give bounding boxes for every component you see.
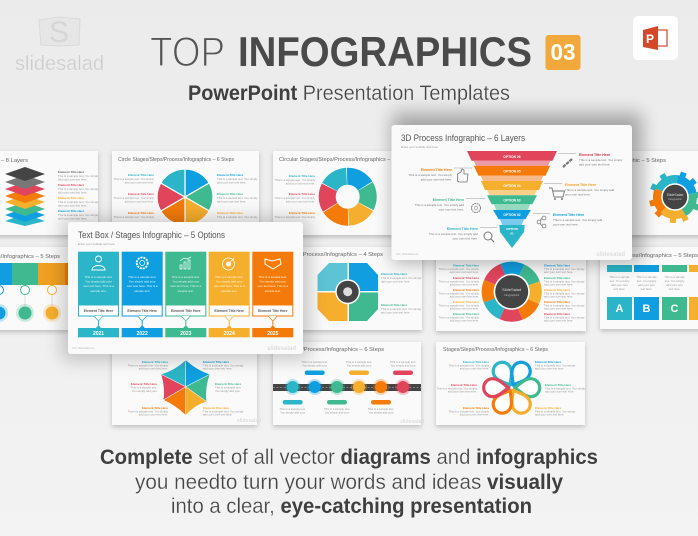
panel: flower card: add your own text here. <box>448 390 477 394</box>
title: TOP <box>150 28 225 75</box>
panel: 4 steps card: Element Title Here <box>381 303 407 307</box>
callout: left lower: This is a sample text. You simply add <box>429 232 478 236</box>
panel: flower card <box>436 342 586 425</box>
panel: wheel card: Element Title Here <box>544 264 570 268</box>
panel: circle stages card: Element Title Here <box>128 192 154 196</box>
panel: hexagon card: This is a sample text. <box>215 386 241 390</box>
panel: A B C card: text. You simply <box>665 279 685 283</box>
panel: wheel card: This is a sample text. You simply <box>439 316 480 320</box>
column 2025: Element Title Here <box>258 309 288 313</box>
panel: flower card: Element Title Here <box>463 406 489 410</box>
flower chart <box>484 359 540 416</box>
panel: hexagon card <box>112 342 261 425</box>
column 2024: 2024 <box>224 331 235 337</box>
panel: text box stages featured card: slidesalad <box>267 346 296 352</box>
panel: road timeline card: This is a sample text. <box>346 360 372 364</box>
panel: circle stages card: This is a sample text. You simply <box>217 215 258 219</box>
panel: circular stages card: add your own text here. <box>286 182 315 186</box>
panel: hexagon card: You simply add your <box>132 389 157 393</box>
panel: hexagon card: Element Title Here <box>215 382 241 386</box>
subtitle: PowerPoint Presentation Templates <box>188 82 510 105</box>
panel: 3D process funnel featured card: 3D Process Infographic – 6 Layers <box>401 133 526 143</box>
panel: 8 layers card: add your own text here. <box>58 190 87 194</box>
panel: circle stages card: Element Title Here <box>217 192 243 196</box>
panel: road timeline card: This is a sample text. <box>280 407 306 411</box>
panel: hexagon card: add your own text here. <box>139 366 168 370</box>
panel: A B C card: text here. <box>669 287 681 291</box>
panel: text box stages featured card <box>62 218 310 360</box>
badge: 03: 03 <box>550 39 576 65</box>
panel: A B C card: This is a sample <box>664 275 685 279</box>
panel: road timeline card: Stages/Steps/Process/Infographics – 6 Steps <box>268 347 384 353</box>
panel: hexagon card: Element Title Here <box>142 360 168 364</box>
callout: left lower: Element Title Here <box>447 227 478 231</box>
panel: text box stages featured card: Text Box / Stages Infographic – 5 Options <box>78 230 226 240</box>
panel: 8 layers card: add your own text here. <box>58 204 87 208</box>
panel: wheel card: Element Title Here <box>453 288 479 292</box>
panel: flower card: Element Title Here <box>535 406 561 410</box>
column 2022: own text here. This is a <box>127 284 158 288</box>
panel: circular stages card: This is a sample text. You simply <box>275 215 316 219</box>
column 2022 <box>122 252 163 337</box>
panel: 8 layers card: add your own text here. <box>58 216 87 220</box>
panel: circle stages card: This is a sample text. You simply <box>114 215 155 219</box>
panel: 4 steps card: add your own text here. <box>381 310 410 314</box>
icon: PowerPoint: P <box>646 32 654 46</box>
callout: left lower: your own text here. <box>452 236 478 240</box>
column 2023: You simply add your <box>172 280 199 284</box>
panel: circle stages card: This is a sample text. You simply <box>114 177 155 181</box>
column 2022: This is a sample text. <box>128 275 156 279</box>
column 2021: 2021 <box>93 331 104 337</box>
panel: road timeline card: You simply add your <box>280 410 305 414</box>
panel: circle stages card: This is a sample text. You simply <box>217 177 258 181</box>
column 2023: This is a sample text. <box>172 275 200 279</box>
column 2021: You simply add your <box>85 280 112 284</box>
panel: 5 steps left card <box>0 247 75 330</box>
panel: flower card: add your own text here. <box>460 412 489 416</box>
callout: right middle <box>544 183 615 200</box>
title: INFOGRAPHICS <box>238 28 532 75</box>
pie chart <box>157 169 213 225</box>
panel: wheel card: Element Title Here <box>453 264 479 268</box>
panel: wheel card: Element Title Here <box>453 312 479 316</box>
column 2022: 2022 <box>137 331 148 337</box>
panel: wheel card: add your own text here. <box>450 270 479 274</box>
callout: right middle: Element Title Here <box>565 183 596 187</box>
panel: circular stages card: This is a sample text. You simply <box>275 196 316 200</box>
callout: left top: This is a sample text. You simply <box>409 173 452 177</box>
callout: left middle: your own text here. <box>438 208 464 212</box>
panel: hexagon card: Element Title Here <box>142 406 168 410</box>
panel: wheel card: add your own text here. <box>450 318 479 322</box>
column 2025: sample text. <box>265 289 281 293</box>
panel: road timeline card: You simply add your <box>390 364 416 368</box>
callout: right middle: your own text here. <box>565 192 591 196</box>
callout: left top <box>409 168 472 182</box>
letter tiles: B <box>643 303 651 315</box>
wheel chart: Infographics <box>504 293 520 297</box>
panel: flower card: add your own text here. <box>535 412 564 416</box>
step markers <box>285 379 411 395</box>
stacked layers <box>5 167 45 226</box>
panel: wheel card: This is a sample text. You simply <box>544 316 585 320</box>
panel: circle stages card: add your own text here. <box>217 200 246 204</box>
panel: hexagon card: Element Title Here <box>203 360 229 364</box>
bottom text block: into a clear, eye-catching presentation <box>171 495 532 518</box>
column 2022: Element Title Here <box>127 309 157 313</box>
callout: right top: Element Title Here <box>579 153 610 157</box>
gear chart: SlideSalad <box>667 193 683 197</box>
panel: wheel card: This is a sample text. You simply <box>544 267 585 271</box>
column 2025: This is a sample text. <box>259 275 287 279</box>
panel: A B C card: This is a sample <box>636 275 657 279</box>
panel: gear card: Infographic – 5 Steps <box>611 158 666 164</box>
panel: road timeline card: This is a sample text. <box>302 360 328 364</box>
panel: circle stages card: This is a sample text. You simply <box>217 196 258 200</box>
panel: text box stages featured card: Enter your subtitle text here <box>78 242 115 246</box>
callout: right top <box>558 153 623 167</box>
gear chart <box>649 172 698 223</box>
panel: road timeline card: You simply add your <box>302 364 327 368</box>
panel: flower card: Element Title Here <box>451 383 477 387</box>
panel: circular stages card: Circular Stages/Steps/Process/Infographics – 6 <box>279 157 395 163</box>
panel: wheel card: add your own text here. <box>544 318 573 322</box>
panel: A B C card: add your own <box>638 283 655 287</box>
callout: right top: add your own text here. <box>579 162 611 166</box>
callout: right middle: This is a sample text. You simply add <box>565 188 615 192</box>
panel: wheel card: Element Title Here <box>544 288 570 292</box>
column 2024: This is a sample text. <box>215 275 243 279</box>
panel: wheel card <box>436 247 586 331</box>
panel: 4 steps card: Stages/Steps/Process/Infographics – 4 Steps <box>267 252 383 258</box>
panel: wheel card: Element Title Here <box>544 276 570 280</box>
panel: A B C card: This is a sample <box>609 275 630 279</box>
panel: road timeline card: This is a sample text. <box>368 407 394 411</box>
panel: road timeline card: You simply add your <box>346 364 372 368</box>
panel: 8 layers card: add your own text here. <box>58 178 87 182</box>
panel: A B C card: text here. <box>614 287 626 291</box>
callout: left lower <box>429 227 497 242</box>
callout: left top: Element Title Here <box>421 168 452 172</box>
column 2023: 2023 <box>180 331 192 337</box>
panel: wheel card: add your own text here. <box>544 282 573 286</box>
column 2021: own text here. This is a <box>83 284 114 288</box>
column 2023: own text here. This is a <box>170 284 202 288</box>
panel: wheel card: Element Title Here <box>453 276 479 280</box>
panel: A B C card: text. You simply <box>637 279 657 283</box>
panel: 4 steps card <box>267 247 422 330</box>
panel: 8 layers card: This is a sample text. You simply <box>58 200 99 204</box>
panel: flower card: This is a sample text. You simply <box>437 386 478 390</box>
panel: text box stages featured card: 100 | SlideSalad.com <box>72 347 95 350</box>
panel: flower card: This is a sample text. You simply <box>449 410 490 414</box>
panel: hexagon card: Element Title Here <box>203 406 229 410</box>
panel: hexagon card: This is a sample text. <box>131 386 157 390</box>
column 2022: sample text. <box>134 289 150 293</box>
panel: 3D process funnel featured card <box>392 113 642 263</box>
callout: right lower: your own text here. <box>553 222 579 226</box>
panel: flower card: This is a sample text. You simply <box>535 364 576 368</box>
panel: flower card: add your own text here. <box>545 390 574 394</box>
panel: 8 layers card: Element Title Here <box>58 170 84 174</box>
column 2021: sample text. <box>90 289 107 293</box>
funnel chart: OPTION <box>506 227 518 231</box>
callout: right lower: Element Title Here <box>553 213 584 217</box>
panel: A B C card: add your own <box>666 283 683 287</box>
column headers <box>607 265 698 272</box>
callout: left middle <box>415 198 485 212</box>
panel: hexagon card: This is a sample text. You simply <box>203 410 244 414</box>
column 2023: Element Title Here <box>171 309 201 313</box>
funnel chart: OPTION 04 <box>503 184 521 188</box>
panel: circle stages card: add your own text here. <box>125 180 154 184</box>
panel: 4 steps card: This is a sample text. You simply <box>381 307 422 311</box>
panel: wheel card: add your own text here. <box>450 306 479 310</box>
panel: circle stages card: Element Title Here <box>217 211 243 215</box>
column 2025 <box>252 252 293 337</box>
panel: 8 layers card <box>0 151 99 235</box>
column 2023 <box>165 252 206 337</box>
panel: circular stages card: Element Title Here <box>289 174 315 178</box>
panel: 8 layers card: This is a sample text. You simply <box>58 174 99 178</box>
hexagon chart <box>161 360 210 415</box>
panel: A B C card: add your own <box>611 283 628 287</box>
callout: right lower <box>533 213 603 228</box>
panel: wheel card: add your own text here. <box>544 306 573 310</box>
funnel chart: 01 <box>510 232 514 236</box>
panel: wheel card: This is a sample text. You simply <box>544 280 585 284</box>
donut chart <box>327 176 368 217</box>
panel: circle stages card: Element Title Here <box>128 211 154 215</box>
bottom text block: you needto turn your words and ideas visually <box>135 471 563 494</box>
panel: flower card: Stages/Steps/Process/Infographics – 6 Steps <box>443 347 548 353</box>
option pills <box>283 370 413 404</box>
panel: wheel card: add your own text here. <box>544 270 573 274</box>
funnel chart: OPTION 03 <box>503 198 521 202</box>
panel: flower card: This is a sample text. You simply <box>545 386 586 390</box>
panel: wheel card: Element Title Here <box>544 312 570 316</box>
funnel chart: OPTION 02 <box>503 213 521 217</box>
panel: flower card: This is a sample text. You simply <box>449 364 490 368</box>
panel: 4 steps card: add your own text here. <box>381 280 410 284</box>
panel: flower card: Element Title Here <box>463 360 489 364</box>
wheel chart <box>481 261 542 322</box>
colour bands <box>0 263 75 285</box>
panel: 8 layers card: Element Title Here <box>58 209 84 213</box>
column 2021: This is a sample text. <box>84 275 113 279</box>
panel: 4 steps card: Element Title Here <box>381 272 407 276</box>
panel: 8 layers card: Element Title Here <box>58 196 84 200</box>
panel: circle stages card: Circle Stages/Steps/Process/Infographics – 6 Steps <box>118 157 234 163</box>
panel: circular stages card: Element Title Here <box>289 192 315 196</box>
panel: hexagon card: This is a sample text. You simply <box>128 410 169 414</box>
panel: wheel card: This is a sample text. You simply <box>544 292 585 296</box>
panel: wheel card: Element Title Here <box>544 300 570 304</box>
panel: wheel card: This is a sample text. You simply <box>439 292 480 296</box>
badge: 03 <box>546 35 580 70</box>
panel: 3D process funnel featured card: 100 | SlideSalad.com <box>396 253 419 256</box>
panel: hexagon card: add your own text here. <box>139 412 168 416</box>
panel: 3D process funnel featured card: Enter your subtitle text here <box>401 145 438 149</box>
column 2024: You simply add your <box>216 280 243 284</box>
panel: A B C card: text here. <box>641 287 653 291</box>
letter tiles <box>607 297 698 320</box>
panel: hexagon card: slidesalad <box>237 418 261 424</box>
road <box>273 384 421 391</box>
panel: hexagon card: You simply add your <box>215 389 240 393</box>
panel: circle stages card: add your own text here. <box>125 200 154 204</box>
panel: flower card: Element Title Here <box>535 360 561 364</box>
panel: hexagon card: Element Title Here <box>131 382 157 386</box>
panel: hexagon card: This is a sample text. You simply <box>128 364 169 368</box>
panel: circle stages card: This is a sample text. You simply <box>114 196 155 200</box>
logo: slidesalad: slidesalad <box>15 53 104 75</box>
panel: circular stages card: This is a sample text. You simply <box>275 178 316 182</box>
panel: 4 steps card: This is a sample text. You simply <box>381 276 422 280</box>
column 2024: Element Title Here <box>214 309 244 313</box>
panel: circle stages card: Element Title Here <box>128 173 154 177</box>
panel: A B C card: Process/Infographics – 5 Steps <box>618 253 698 259</box>
panel: circle stages card: add your own text here. <box>217 180 246 184</box>
step circles <box>0 286 61 322</box>
column 2025: 2025 <box>267 331 279 337</box>
panel: flower card: add your own text here. <box>535 366 564 370</box>
panel: road timeline card: This is a sample text. <box>324 407 350 411</box>
panel: hexagon card: add your own text here. <box>203 412 232 416</box>
callout: left middle: This is a sample text. You simply add <box>415 203 464 207</box>
column 2024: sample text. <box>221 289 237 293</box>
panel: circular stages card: Element Title Here <box>289 211 315 215</box>
logo: slidesalad <box>15 16 104 75</box>
panel: wheel card: add your own text here. <box>544 294 573 298</box>
panel: 8 layers card: This is a sample text. You simply <box>58 213 99 217</box>
panel: wheel card: add your own text here. <box>450 294 479 298</box>
bottom text block: Complete set of all vector diagrams and infographics <box>100 446 598 469</box>
panel: circular stages card <box>273 151 398 235</box>
panel: wheel card: This is a sample text. You simply <box>439 304 480 308</box>
column 2024 <box>209 252 250 337</box>
logo: slidesalad: S <box>49 16 69 49</box>
panel: flower card: This is a sample text. You simply <box>535 410 576 414</box>
panel: wheel card: This is a sample text. You simply <box>544 304 585 308</box>
column 2021 <box>78 252 119 337</box>
funnel chart: OPTION 05 <box>503 170 521 174</box>
panel: road timeline card: This is a sample text. <box>390 360 416 364</box>
panel: flower card: Element Title Here <box>545 383 571 387</box>
callout: left middle: Element Title Here <box>433 198 464 202</box>
panel: flower card: add your own text here. <box>460 366 489 370</box>
bottom text block <box>100 446 598 518</box>
panel: 8 layers card: This is a sample text. You simply <box>58 187 99 191</box>
letter tiles: C <box>671 303 679 315</box>
wheel chart: SlideSalad <box>502 287 521 292</box>
panel: A B C card: text. You simply <box>610 279 630 283</box>
octagon chart <box>318 263 378 321</box>
panel: hexagon card: add your own text here. <box>203 366 232 370</box>
panel: wheel card: This is a sample text. You simply <box>439 280 480 284</box>
panel: A B C card <box>600 247 698 329</box>
panel: road timeline card: slidesalad <box>400 419 424 425</box>
callout: right top: This is a sample text. You simply <box>579 158 623 162</box>
panel: gear card <box>611 151 698 235</box>
panel: circle stages card: Element Title Here <box>217 173 243 177</box>
funnel chart: OPTION 06 <box>503 155 521 159</box>
panel: hexagon card: This is a sample text. You simply <box>203 364 244 368</box>
column 2024: own text here. This is a <box>214 284 245 288</box>
column 2025: You simply add your <box>259 280 286 284</box>
icon: PowerPoint <box>633 16 678 60</box>
gear chart: Infographic <box>668 197 683 201</box>
panel: circular stages card: add your own text here. <box>286 200 315 204</box>
panel: wheel card: add your own text here. <box>450 282 479 286</box>
column 2023: sample text. <box>178 289 194 293</box>
column 2025: own text here. This is a <box>257 284 289 288</box>
callout: right lower: This is a sample text. You simply add <box>553 218 603 222</box>
callout: left top: add your own text here. <box>421 178 452 182</box>
panel: 3D process funnel featured card: slidesalad <box>596 252 625 258</box>
funnel chart <box>467 151 557 248</box>
column 2021: Element Title Here <box>84 309 113 313</box>
panel: road timeline card: You simply add your <box>324 410 350 414</box>
column 2022: You simply add your <box>129 280 156 284</box>
panel: circle stages card <box>112 151 259 235</box>
panel: wheel card: This is a sample text. You simply <box>439 267 480 271</box>
panel: 8 layers card: Element Title Here <box>58 183 84 187</box>
panel: road timeline card <box>268 342 424 425</box>
panel: road timeline card: You simply add your <box>368 410 394 414</box>
panel: wheel card: Element Title Here <box>453 300 479 304</box>
letter tiles: A <box>616 303 624 315</box>
